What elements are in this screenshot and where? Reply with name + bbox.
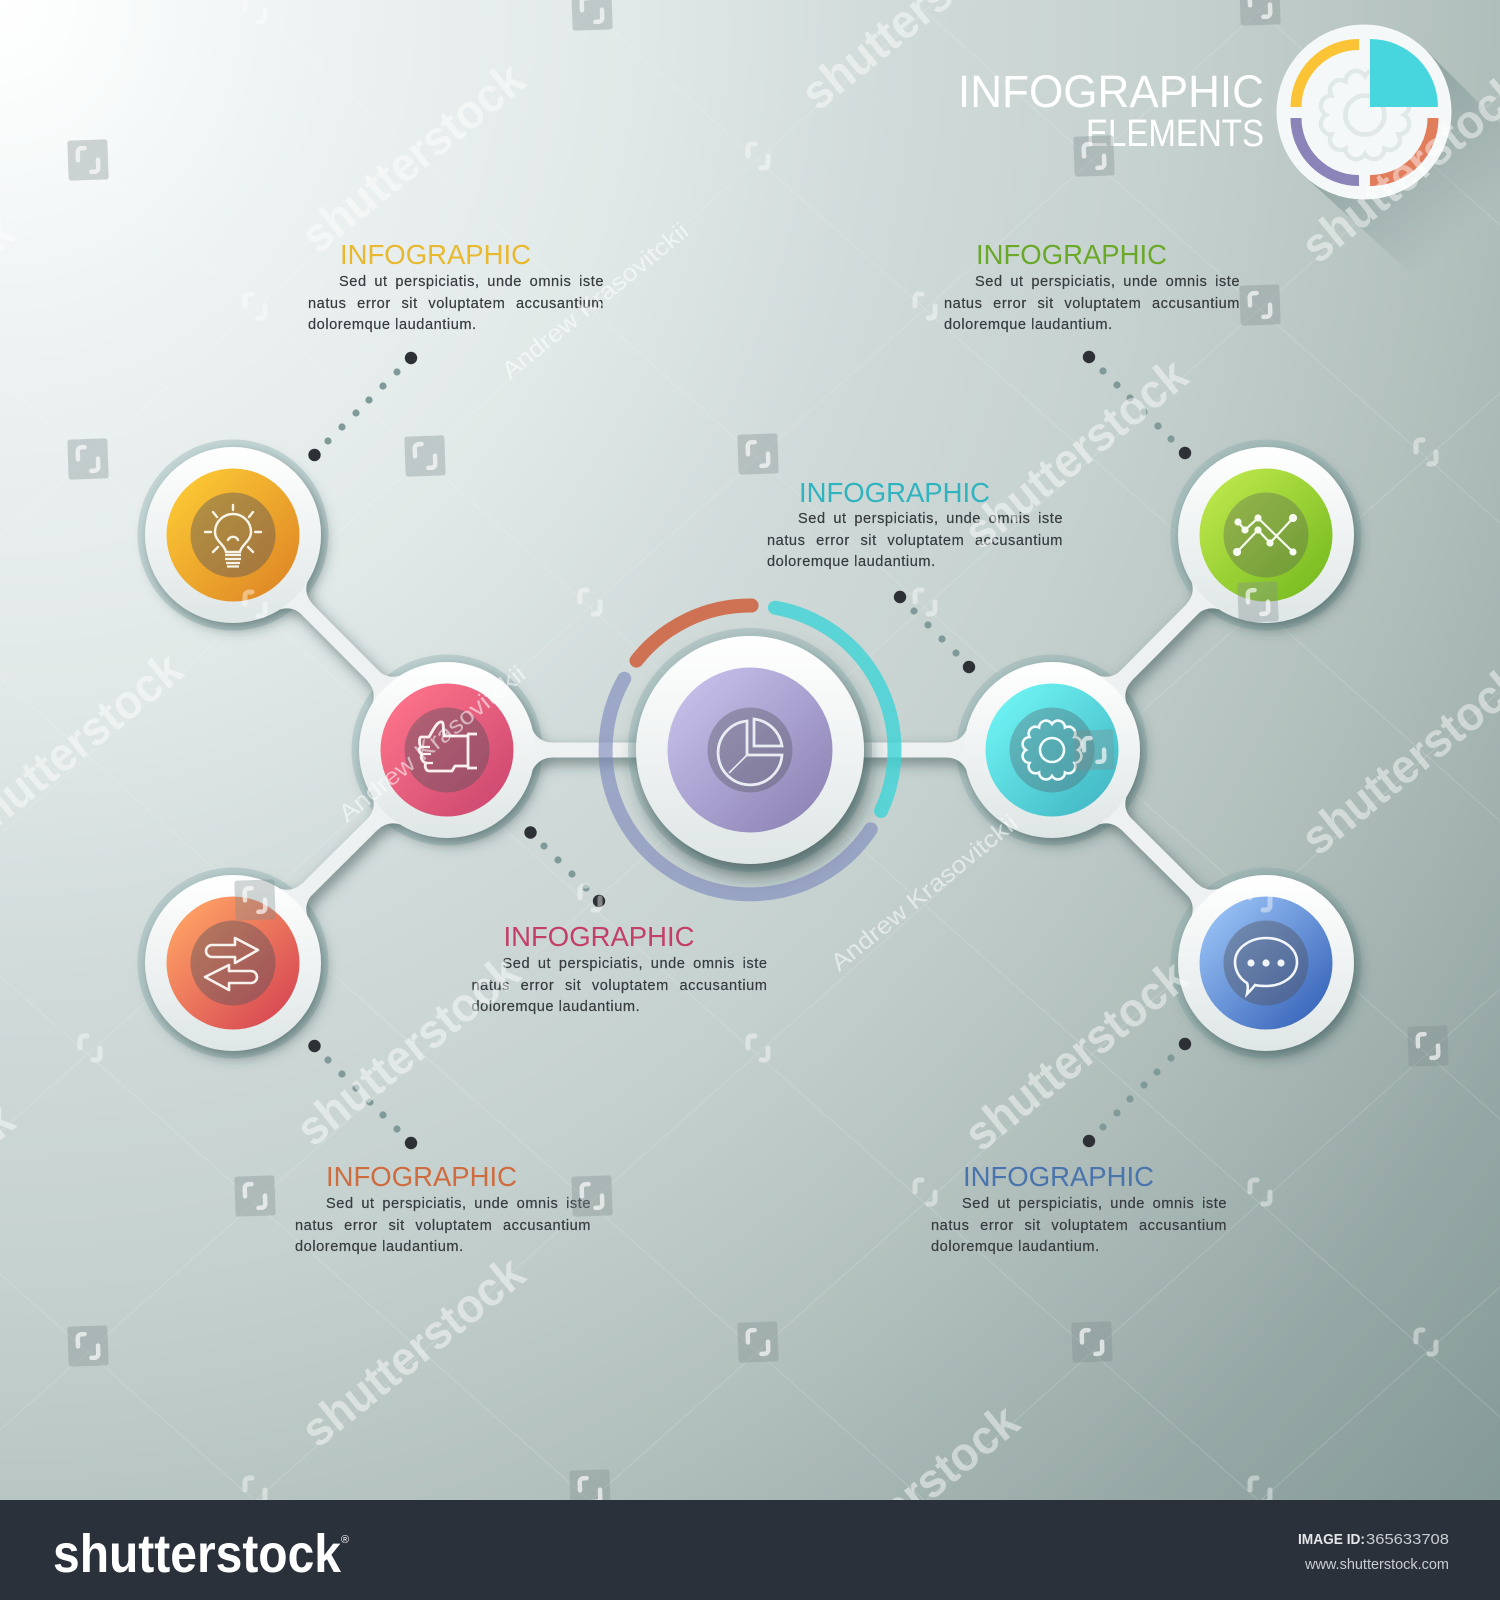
watermark overlay: shutterstock xyxy=(292,52,535,264)
icon: gear xyxy=(1023,721,1081,779)
main title: INFOGRAPHIC xyxy=(958,66,1264,117)
badge disc xyxy=(1276,24,1452,200)
text block: cyan: Sed ut perspiciatis, unde omnis iste xyxy=(798,511,1063,527)
footer bar xyxy=(0,1500,1500,1600)
badge quarter pie xyxy=(1370,39,1438,107)
node: orange exchange xyxy=(166,896,300,1030)
website: www.shutterstock.com xyxy=(1304,1556,1449,1573)
hub colored core xyxy=(668,668,832,832)
icon: line chart xyxy=(1234,515,1296,555)
watermark overlay: Andrew Krasovitckii xyxy=(826,810,1023,977)
badge purple arc xyxy=(1296,118,1359,181)
text block: pink: natus error sit voluptatem accusantium xyxy=(472,978,768,994)
text block: orange xyxy=(295,1161,591,1255)
text block: yellow: Sed ut perspiciatis, unde omnis iste xyxy=(339,274,604,290)
text block: yellow xyxy=(308,239,604,333)
text block: pink: INFOGRAPHIC xyxy=(504,921,694,952)
hub disc xyxy=(636,636,864,864)
text block: cyan: natus error sit voluptatem accusantium xyxy=(767,533,1063,549)
icon: pie chart xyxy=(718,719,782,785)
text block: yellow: INFOGRAPHIC xyxy=(340,239,531,270)
text block: orange: natus error sit voluptatem accusantium xyxy=(295,1218,591,1234)
badge gear icon xyxy=(1321,71,1409,159)
footer logo: shutterstock xyxy=(53,1524,342,1584)
watermark overlay: shutterstock xyxy=(292,1246,535,1458)
text block: orange: INFOGRAPHIC xyxy=(326,1161,517,1192)
footer logo: ® xyxy=(341,1534,349,1546)
text block: orange: Sed ut perspiciatis, unde omnis iste xyxy=(326,1196,591,1212)
image id: IMAGE ID: xyxy=(1298,1531,1365,1548)
text block: green: natus error sit voluptatem accusantium xyxy=(944,296,1240,312)
text block: blue xyxy=(931,1161,1227,1255)
text block: cyan: doloremque laudantium. xyxy=(767,554,936,570)
text block: blue: doloremque laudantium. xyxy=(931,1239,1100,1255)
watermark overlay: Andrew Krasovitckii xyxy=(334,661,531,828)
text block: green xyxy=(944,239,1240,333)
text block: orange: doloremque laudantium. xyxy=(295,1239,464,1255)
text block: yellow: doloremque laudantium. xyxy=(308,317,477,333)
node halos xyxy=(138,440,1362,1058)
text block: cyan: INFOGRAPHIC xyxy=(799,477,990,508)
image id number: 365633708 xyxy=(1366,1531,1449,1548)
watermark overlay: erstock xyxy=(872,1394,1029,1537)
arc: cyan xyxy=(775,608,894,811)
hub halo xyxy=(628,628,872,872)
text block: blue: natus error sit voluptatem accusantium xyxy=(931,1218,1227,1234)
main title xyxy=(958,66,1264,155)
node: pink thumbs up xyxy=(380,684,514,816)
node: cyan settings xyxy=(986,684,1118,816)
watermark overlay: shutterstock xyxy=(955,950,1198,1162)
central hub xyxy=(606,605,894,894)
icon: thumb up xyxy=(419,722,477,771)
dotted leaders xyxy=(308,351,1191,1149)
text block: green: doloremque laudantium. xyxy=(944,317,1113,333)
text block: blue: Sed ut perspiciatis, unde omnis iste xyxy=(962,1196,1227,1212)
header badge xyxy=(1276,24,1500,320)
connector network xyxy=(145,447,1354,1051)
hub icon backing xyxy=(708,708,792,792)
badge orange arc xyxy=(1370,118,1433,181)
text block: green: INFOGRAPHIC xyxy=(976,239,1167,270)
text block: pink: doloremque laudantium. xyxy=(472,999,640,1015)
main title: ELEMENTS xyxy=(1086,113,1264,155)
watermark overlay: Andrew Krasovitckii xyxy=(497,218,694,385)
watermark overlay: shutterstock xyxy=(287,945,530,1157)
icon: light bulb xyxy=(205,505,261,566)
badge yellow arc xyxy=(1296,44,1359,107)
icon: exchange arrows xyxy=(205,938,258,990)
arc: orange xyxy=(636,605,752,661)
text block: green: Sed ut perspiciatis, unde omnis iste xyxy=(975,274,1240,290)
text block: blue: INFOGRAPHIC xyxy=(963,1161,1154,1192)
node: blue message xyxy=(1200,896,1332,1030)
text block: pink xyxy=(472,921,768,1015)
node: green chart xyxy=(1200,468,1332,602)
watermark overlay: shutterstock xyxy=(955,348,1198,560)
text block: cyan xyxy=(767,477,1063,570)
icon: speech bubble xyxy=(1235,938,1297,994)
text block: yellow: natus error sit voluptatem accusantium xyxy=(308,296,604,312)
badge long shadow xyxy=(1302,50,1500,320)
node: yellow idea xyxy=(166,468,300,602)
arc: purple xyxy=(606,679,871,894)
text block: pink: Sed ut perspiciatis, unde omnis iste xyxy=(502,956,768,972)
